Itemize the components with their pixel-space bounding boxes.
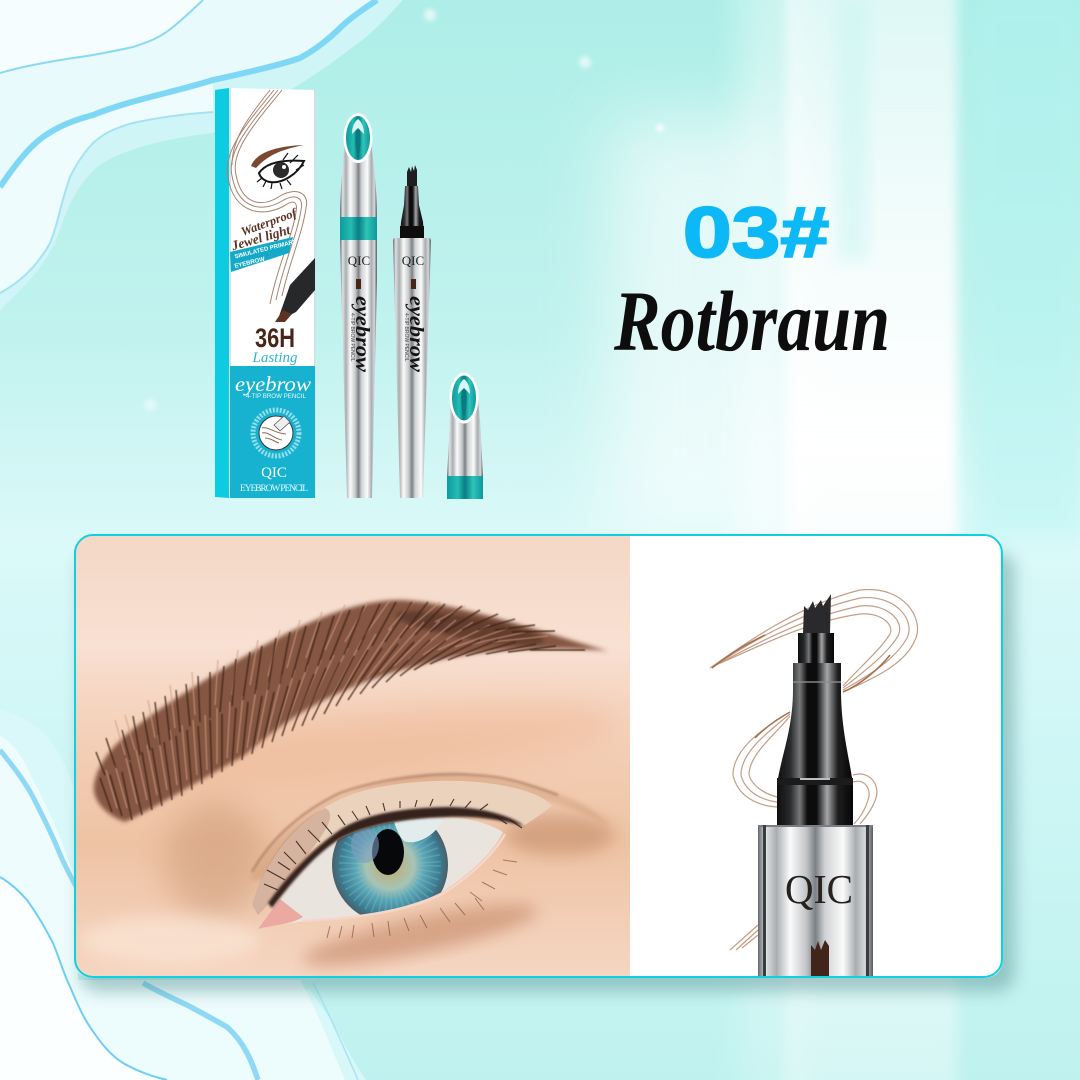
product: uncapped pencil: QIC xyxy=(402,253,424,268)
box lower panel xyxy=(230,366,315,498)
thin line right xyxy=(313,983,358,1080)
product: capped pencil: 4-TIP BROW PENCIL xyxy=(349,313,355,362)
box ribbon label: EYEBROW xyxy=(234,257,266,270)
iris xyxy=(332,818,448,915)
box 36H: 36H xyxy=(255,323,295,353)
product: uncapped pencil: 4-TIP BROW PENCIL xyxy=(403,313,409,362)
box nib illustration xyxy=(275,258,315,322)
swirl strokes xyxy=(710,590,918,950)
upper eyelid crease xyxy=(252,774,558,872)
lower lashes xyxy=(327,860,517,938)
box brand: QIC xyxy=(261,465,287,481)
nib xyxy=(803,594,831,633)
box spine xyxy=(215,88,229,498)
product: eyebrow pencil box xyxy=(215,88,316,498)
thin blue line upper xyxy=(0,0,203,73)
eyelid fold shading xyxy=(250,774,610,880)
box product name: EYEBROW PENCIL xyxy=(240,484,308,494)
white band xyxy=(0,735,345,1080)
product: uncapped pencil: eyebrow xyxy=(405,296,427,373)
photo: right pencil close-up xyxy=(710,588,918,976)
box ribbon label: SIMULATED PRIMARY xyxy=(234,239,297,260)
thick blue ribbon bottom xyxy=(143,983,258,1080)
product: eyebrow pencil box: Jewel light xyxy=(229,222,293,253)
light hairs xyxy=(106,600,548,808)
thick blue ribbon left xyxy=(0,750,78,890)
product: capped pencil: eyebrow xyxy=(351,296,373,373)
box eye illustration xyxy=(251,145,304,189)
shade number: 03# xyxy=(683,194,829,273)
box script text: Waterproof xyxy=(239,205,300,239)
panel shadow xyxy=(80,552,1015,992)
collar xyxy=(798,633,834,663)
dark hairs xyxy=(96,602,585,820)
outer pale shape xyxy=(0,0,403,310)
product: pencil cap xyxy=(447,372,483,499)
box Lasting: Lasting xyxy=(251,350,298,366)
eyeball xyxy=(262,817,503,927)
inner white band xyxy=(0,0,377,187)
box subtitle: 4-TIP BROW PENCIL xyxy=(246,393,307,400)
nib mark on barrel xyxy=(811,940,829,976)
box front xyxy=(229,88,315,498)
upper lash line xyxy=(268,807,524,908)
box swirl lines xyxy=(227,90,307,304)
product: capped pencil: QIC xyxy=(348,253,370,268)
decorative wave: bottom left xyxy=(0,710,366,1080)
brand on barrel: QIC xyxy=(785,866,853,912)
product: uncapped pencil xyxy=(393,165,431,498)
thin blue line lower xyxy=(0,112,213,293)
black cone xyxy=(777,663,853,825)
silver barrel xyxy=(758,825,873,980)
box eyebrow wordmark: eyebrow xyxy=(235,372,311,396)
upper lashes xyxy=(264,799,522,890)
box badge xyxy=(253,410,299,456)
shade name: Rotbraun xyxy=(613,273,890,369)
thick blue ribbon xyxy=(0,0,377,187)
panel: before after image xyxy=(74,534,1003,980)
product: capped pencil xyxy=(340,113,377,498)
decorative wave: top left xyxy=(0,0,403,310)
eyelid xyxy=(252,781,552,915)
photo: eye and eyebrow xyxy=(76,536,918,976)
pale outer shape xyxy=(0,710,366,1080)
tear duct xyxy=(258,899,303,929)
box ribbon label xyxy=(230,237,297,272)
lower white shape xyxy=(0,877,167,1080)
lower lid rim xyxy=(303,834,505,921)
eyebrow xyxy=(94,600,608,822)
thin blue line xyxy=(0,877,167,1080)
